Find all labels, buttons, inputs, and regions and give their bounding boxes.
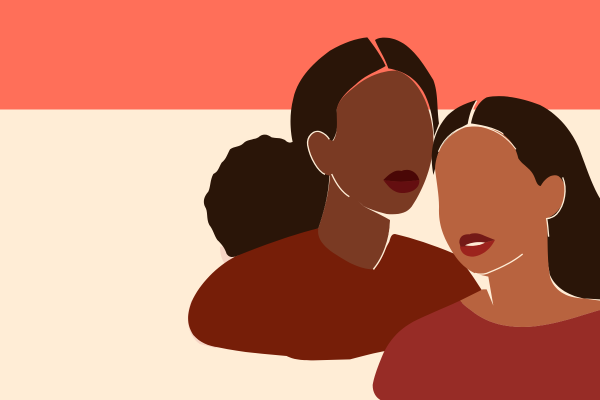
parting highlight xyxy=(469,101,477,124)
lower lip xyxy=(383,180,419,193)
ear outline xyxy=(308,131,329,174)
jaw highlight xyxy=(475,254,523,274)
upper lip xyxy=(383,170,419,181)
back woman shirt xyxy=(188,228,482,360)
figure: back woman head xyxy=(290,37,439,269)
upper lip xyxy=(459,233,495,247)
hairline highlight xyxy=(438,125,516,152)
back woman afro xyxy=(204,130,329,267)
front hair small left section xyxy=(432,100,477,175)
jaw highlight xyxy=(332,174,349,197)
face and ear xyxy=(308,71,433,214)
lips xyxy=(459,233,495,257)
figure: front woman xyxy=(373,96,600,400)
teeth xyxy=(465,242,485,246)
neck highlight xyxy=(373,222,391,269)
afro hair halo xyxy=(220,232,303,267)
afro hair puff xyxy=(204,130,329,257)
shirt halo xyxy=(188,300,217,348)
shirt shape xyxy=(188,228,482,360)
lower lip xyxy=(460,240,495,257)
ear outline xyxy=(547,177,565,237)
lips xyxy=(383,170,419,193)
shirt shape xyxy=(373,301,600,400)
background: coral band xyxy=(0,0,600,110)
neck xyxy=(318,173,390,269)
back hair left section xyxy=(290,37,386,145)
front hair main section xyxy=(471,96,600,299)
back hair right section xyxy=(375,38,439,137)
face, ear and neck xyxy=(435,126,600,327)
